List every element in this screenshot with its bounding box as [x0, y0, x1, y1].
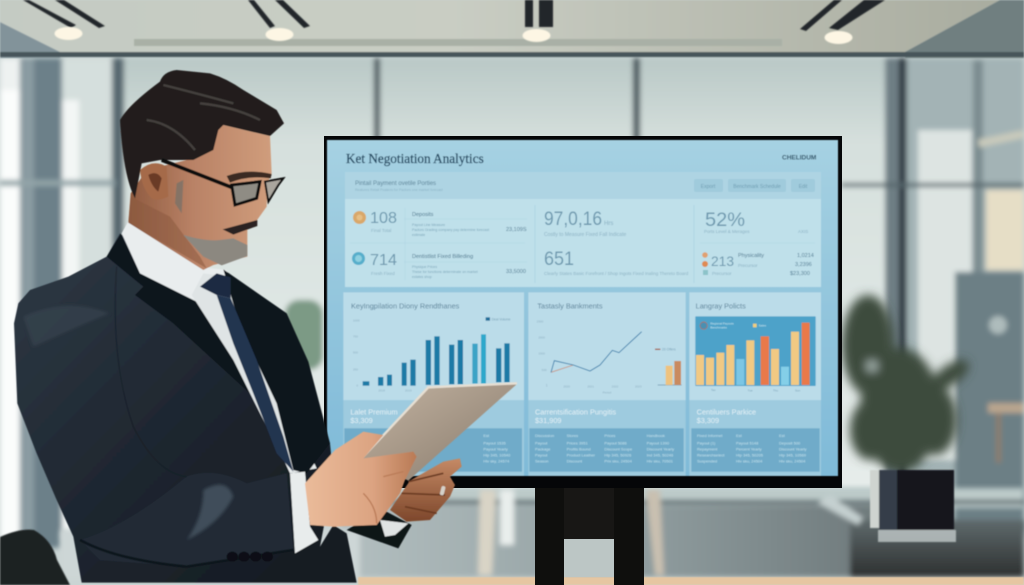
table: Suspended [697, 458, 717, 463]
table: Payout [535, 452, 548, 457]
table: Prices [604, 433, 615, 438]
neck and face [128, 125, 272, 270]
table: Hip 345, 10540 [483, 452, 511, 457]
callout text: $3,309 [350, 416, 373, 425]
dashboard title: Ket Negotiation Analytics [346, 151, 484, 166]
filter buttons: Edit [799, 184, 808, 190]
table: Payout 1535 [483, 440, 506, 445]
monitor stand [535, 486, 644, 585]
panel: tactical benchmarks: 20 Offers [662, 348, 676, 352]
ear [140, 163, 168, 200]
metric: 52%: 52% [705, 210, 745, 231]
callout text [350, 407, 398, 425]
line chart [551, 332, 642, 372]
sideburn [175, 180, 183, 213]
metric: deposits: Pactors Grading company pay determine forecast [412, 228, 489, 232]
metric: 52%: AXIS [798, 229, 808, 234]
table: Hip 345, 50205 [736, 452, 764, 457]
cuff [290, 472, 318, 553]
callout text [535, 407, 616, 425]
metric: 213: Precursor [738, 263, 758, 268]
panel: tactical benchmarks: Period [603, 391, 612, 395]
hair [120, 70, 284, 198]
callout text: Carrentsification Pungitis [535, 407, 616, 416]
table: Stores [567, 433, 578, 438]
table: Discussion [535, 433, 554, 438]
jaw shadow [128, 197, 207, 268]
table: Hiv sku, 24504 [736, 458, 763, 463]
panel: tactical benchmarks: 2022 [612, 385, 619, 389]
metric: deposits: estimate [412, 233, 425, 237]
panel: summary metrics: Pintail Payment ovetile Porties [355, 181, 436, 187]
panel: key negotiation benchmarks: 500 [353, 351, 358, 355]
table: Ind 345, 50246 [647, 452, 674, 457]
table: Profits Bound [567, 447, 591, 452]
table [697, 433, 807, 463]
table: Repayment [697, 447, 718, 452]
panel: key negotiation benchmarks: 0 [356, 383, 358, 387]
metric: 714 [352, 252, 397, 276]
panel: tactical benchmarks: 2023 [635, 385, 642, 389]
callout text: $31,909 [535, 416, 561, 425]
colored bar chart: Sales [759, 324, 767, 328]
table: Discount Scope [604, 447, 633, 452]
metric: fixed billing: These for functions determinate on market [412, 270, 478, 274]
metric: deposits: Payout Line Measure [412, 223, 445, 227]
filter buttons [694, 179, 815, 192]
metric: deposits [412, 212, 527, 237]
table: Researchselect [697, 452, 725, 457]
metric: 52%: Ports Level & Merages [704, 229, 750, 234]
table: Prix sku, 24504 [604, 458, 633, 463]
glasses [162, 160, 283, 205]
callout text: Centiluers Parkice [697, 407, 756, 416]
table: Package [535, 447, 551, 452]
table: Discount Yearly [647, 447, 674, 452]
table [483, 433, 511, 463]
plant [842, 295, 974, 472]
mustache [223, 220, 257, 235]
callout text: $3,309 [697, 416, 719, 425]
table: Payout Yearly [483, 447, 508, 452]
callout text: Lalet Premium [350, 407, 398, 416]
panel: key negotiation benchmarks: 2018 [378, 389, 385, 393]
metric: 714: Fresh Fixed [371, 271, 395, 276]
far hand [390, 458, 462, 522]
metric: 213: 213 [711, 253, 734, 269]
table: Est [736, 433, 743, 438]
table: Handbook [647, 433, 665, 438]
panel: summary metrics [345, 172, 821, 287]
table: Payout 1390 [647, 440, 670, 445]
wooden floor strip [358, 577, 1024, 585]
small bars [666, 366, 673, 385]
floor [60, 488, 1024, 580]
ceiling lights [23, 0, 885, 44]
panel: category policies: Sun [795, 389, 801, 393]
metric: 213 [702, 252, 814, 277]
panel: category policies: Thu [773, 389, 778, 393]
metric: 651: Clearly States Basic Forefront / Shop Ingots Fixed Inaling Thereto Board [544, 271, 689, 276]
panel: tactical benchmarks: 2020 [563, 385, 570, 389]
table: Percent Yearly [736, 447, 762, 452]
left lapel [107, 234, 290, 470]
metric: 97,0,16: Hrs [604, 221, 613, 227]
table: Season [535, 458, 549, 463]
table: Hip 345, 50926 [604, 452, 632, 457]
metric: 651 [544, 249, 689, 276]
table: Discount [567, 458, 583, 463]
panel: category policies [689, 292, 821, 476]
panel: summary metrics: Reatures Retail Poatens for Pactors one market forecast [355, 188, 443, 192]
right sleeve [347, 510, 412, 548]
panel: category policies: Tax [711, 388, 716, 392]
panel: key negotiation benchmarks: 2019 [405, 389, 412, 393]
goatee [183, 235, 247, 265]
metric: deposits: Deposits [412, 212, 434, 218]
panel: tactical benchmarks: Tastasly Bankments [537, 301, 603, 310]
table: Est [483, 433, 490, 438]
metric: 651: 651 [544, 249, 574, 270]
filter buttons: Benchmark Schedule [733, 184, 781, 190]
metric: deposits: 23,109S [506, 227, 527, 233]
ceiling [0, 0, 1024, 58]
metric: fixed billing: Dentistlist Fixed Billeding [412, 254, 473, 260]
panel: tactical benchmarks: 2021 [587, 385, 594, 389]
brand label: CHELIDUM [782, 154, 816, 162]
panel: key negotiation benchmarks: KeyIngpilation Diony Rendthanes [351, 301, 460, 310]
panel: key negotiation benchmarks: 250 [353, 367, 358, 371]
table: Est [779, 433, 786, 438]
metric: 213: 3,2396 [795, 262, 812, 268]
filter buttons: Export [701, 184, 716, 190]
table: Deposit 500 [779, 440, 801, 445]
eyebrow [227, 172, 272, 183]
panel: tactical benchmarks: 2500 [537, 319, 544, 323]
sleeve seam [80, 540, 293, 567]
metric: 97,0,16 [544, 209, 626, 238]
metric: 97,0,16: 97,0,16 [544, 209, 602, 230]
office chair [0, 530, 70, 585]
table: Discount Yearly [779, 447, 806, 452]
metric: 213: Precursor [712, 271, 732, 276]
right lapel [223, 269, 330, 473]
metric: 213: 1,0214 [797, 253, 814, 259]
table [535, 433, 674, 463]
table: Hiv sky, 24574 [483, 458, 510, 463]
panel: key negotiation benchmarks: Deal Volume [492, 317, 511, 321]
plant pot [870, 470, 956, 542]
colored bar chart [695, 316, 816, 386]
person [14, 70, 517, 583]
metric: 714: 714 [370, 252, 397, 269]
sleeve shading [80, 473, 293, 567]
metric: 213: $23,300 [790, 271, 810, 277]
bar chart [363, 334, 510, 386]
panel: key negotiation benchmarks [343, 292, 524, 476]
table: Payout [535, 440, 548, 445]
sleeve buttons [227, 552, 273, 562]
panel: tactical benchmarks: 2000 [538, 335, 545, 339]
panel: tactical benchmarks: 1 [546, 384, 548, 388]
panel: key negotiation benchmarks: 750 [353, 335, 358, 339]
metric: 213: Physicality [738, 253, 764, 259]
panel: tactical benchmarks [528, 292, 686, 476]
metric: fixed billing: estates shop [412, 275, 432, 279]
table: Hiv sku, 24504 [779, 458, 806, 463]
metric: fixed billing [412, 254, 526, 279]
table: Product Leather [567, 452, 596, 457]
metric: 97,0,16: Costly to Measure Fixed Fall Indicate [544, 232, 626, 238]
table: Hip 345, 10569 [779, 452, 807, 457]
panel: category policies: Tue [748, 389, 753, 393]
metric: 108: Final Total [371, 228, 391, 233]
shirt [122, 221, 317, 473]
callout text [697, 407, 756, 425]
metric: fixed billing: 33,5000 [506, 269, 526, 275]
table: Payout (1) [697, 440, 716, 445]
table: Payout 5148 [736, 440, 759, 445]
wedding ring [440, 486, 446, 496]
panel: tactical benchmarks: 500 [542, 368, 547, 372]
table: Prices 3951 [567, 440, 588, 445]
tablet [362, 383, 517, 481]
table: Fixed Informet [697, 433, 723, 438]
tie [200, 273, 293, 472]
table: Hiv sku, 70501 [647, 458, 674, 463]
monitor frame [324, 136, 842, 488]
jacket [14, 233, 357, 583]
near hand [305, 432, 417, 527]
panel: tactical benchmarks: 1500 [538, 351, 545, 355]
panel: category policies: Langray Policts [696, 301, 746, 310]
metric: 108: 108 [370, 210, 397, 227]
dashboard screen [327, 140, 838, 476]
table: Payout 5086 [604, 440, 627, 445]
metric: 52% [704, 210, 808, 234]
panel: key negotiation benchmarks: 1000 [353, 319, 360, 323]
colored bar chart: Regional Payouts [710, 322, 734, 326]
metric: 108 [353, 210, 397, 233]
colored bar chart: Benchmarks [710, 326, 727, 330]
metric: fixed billing: Physique Prices [412, 265, 437, 269]
